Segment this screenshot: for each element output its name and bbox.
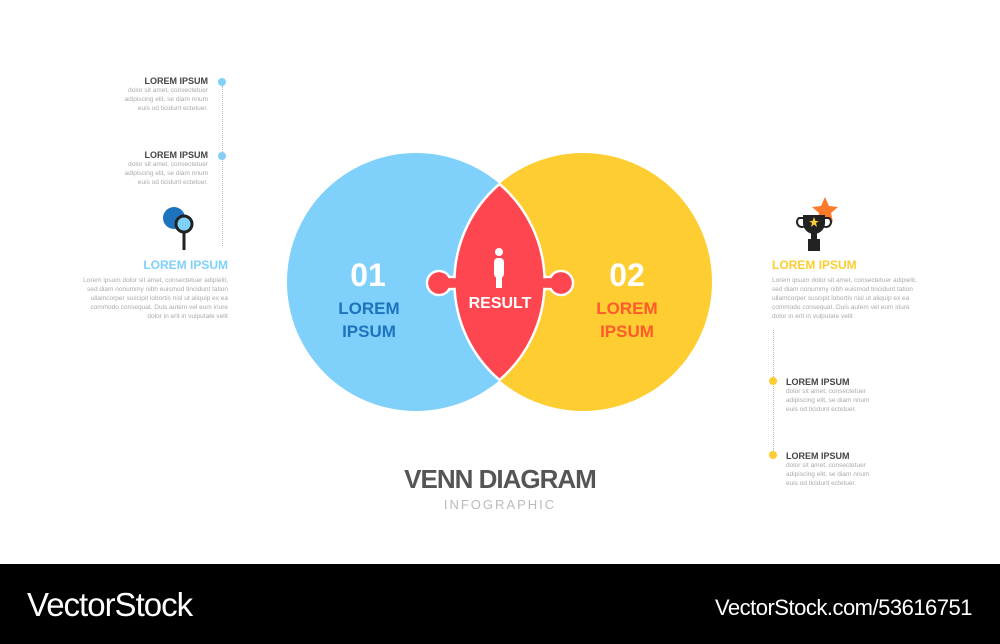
footer bar: VectorStock xyxy=(27,586,192,623)
right main text: Lorem ipsum dolor sit amet, consectetuer adipielit, xyxy=(772,277,917,284)
right item 2: dolor sit amet, consectetuer xyxy=(786,462,866,469)
left main text: Lorem ipsum dolor sit amet, consectetuer adipielit, xyxy=(83,277,228,284)
right item 1: euis od ticidunt ectetuer. xyxy=(786,406,856,413)
right timeline xyxy=(769,330,777,459)
left item 2: euis od ticidunt ectetuer. xyxy=(138,179,208,186)
left main text xyxy=(83,258,228,320)
left item 2: adipiscing elit, se diam nnum xyxy=(125,170,208,177)
icon: magnifier xyxy=(163,207,194,250)
circle 2 label: 02 xyxy=(609,257,645,293)
left main text: ullamcorper suscipit lobortis nisl ut aliquip ex ea xyxy=(91,295,228,302)
circle 1 label: LOREM xyxy=(338,299,400,318)
right main text: commodo consequat. Duis autem vel eum iriure xyxy=(772,304,910,311)
left item 2 xyxy=(124,150,208,186)
right main text: dolor in erit in vulputate velit xyxy=(772,313,853,320)
right item 1: dolor sit amet, consectetuer xyxy=(786,388,866,395)
footer bar xyxy=(0,564,1000,644)
left main text: dolor in erit in vulputate velit xyxy=(147,313,228,320)
circle 2 label xyxy=(596,257,658,341)
right item 2: adipiscing elit, se diam nnum xyxy=(786,471,869,478)
circle 2 label: LOREM xyxy=(596,299,658,318)
circle 1 label xyxy=(338,257,400,341)
title: VENN DIAGRAM xyxy=(404,464,596,494)
right item 1: adipiscing elit, se diam nnum xyxy=(786,397,869,404)
left item 1 xyxy=(124,76,208,112)
left main text: commodo consequat. Duis autem vel eum iriure xyxy=(90,304,228,311)
lens: result: RESULT xyxy=(469,295,532,312)
right item 1: LOREM IPSUM xyxy=(786,377,850,387)
left item 2: dolor sit amet, consectetuer xyxy=(128,161,208,168)
title xyxy=(404,464,596,512)
right main text: LOREM IPSUM xyxy=(772,258,857,272)
footer bar: VectorStock.com/53616751 xyxy=(715,595,972,620)
left item 1: euis od ticidunt ectetuer. xyxy=(138,105,208,112)
left timeline xyxy=(218,78,226,246)
left item 1: adipiscing elit, se diam nnum xyxy=(125,96,208,103)
left main text: LOREM IPSUM xyxy=(143,258,228,272)
right main text: sed diam nonummy nibh euismod tincidunt tation xyxy=(772,286,913,293)
circle 2 label: IPSUM xyxy=(600,322,654,341)
icon: trophy xyxy=(796,197,838,251)
right item 2: LOREM IPSUM xyxy=(786,451,850,461)
right item 1 xyxy=(786,377,869,413)
right main text xyxy=(772,258,917,320)
title: INFOGRAPHIC xyxy=(444,497,556,512)
circle 1 label: 01 xyxy=(350,257,386,293)
left item 1: dolor sit amet, consectetuer xyxy=(128,87,208,94)
circle 1 label: IPSUM xyxy=(342,322,396,341)
left item 2: LOREM IPSUM xyxy=(144,150,208,160)
right item 2: euis od ticidunt ectetuer. xyxy=(786,480,856,487)
lens: result xyxy=(427,184,573,380)
venn diagram xyxy=(287,153,712,411)
left main text: sed diam nonummy nibh euismod tincidunt tation xyxy=(87,286,228,293)
right main text: ullamcorper suscipit lobortis nisl ut aliquip ex ea xyxy=(772,295,909,302)
right item 2 xyxy=(786,451,869,487)
left item 1: LOREM IPSUM xyxy=(144,76,208,86)
